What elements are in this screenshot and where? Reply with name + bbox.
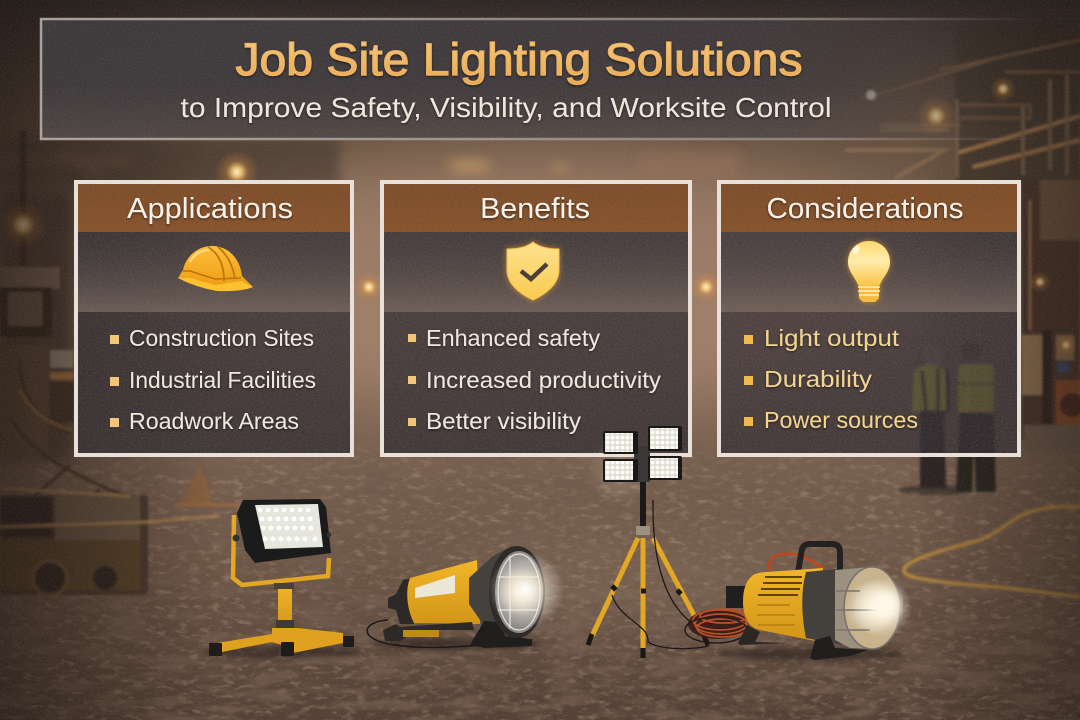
list: benefits	[408, 325, 662, 434]
list: applications: Roadwork Areas	[129, 408, 299, 434]
pole	[640, 480, 646, 530]
head	[237, 499, 331, 563]
list: benefits: Better visibility	[426, 408, 582, 434]
background: machine at lower left	[0, 462, 240, 595]
subtitle: to Improve Safety, Visibility, and Worksite Control	[180, 92, 832, 123]
equipment: yellow spot light with cable reel	[685, 544, 912, 660]
list: considerations: Light output	[764, 325, 900, 351]
list: considerations	[744, 325, 918, 433]
shroud	[802, 569, 842, 645]
icon: shield with check	[507, 242, 559, 300]
heading: benefits: Benefits	[480, 193, 590, 225]
background: ground texture	[0, 430, 1080, 720]
background: scaffolding at upper right	[845, 18, 1080, 183]
list: applications: Industrial Facilities	[129, 367, 316, 393]
panel: considerations	[719, 182, 1019, 455]
title panel	[41, 19, 1041, 139]
equipment: LED flood light on stand	[204, 499, 360, 658]
power box	[726, 586, 748, 608]
skid	[383, 622, 474, 641]
equipment: yellow work light with cord	[367, 546, 564, 650]
cage	[498, 554, 540, 630]
LED grid	[258, 508, 317, 541]
heading: applications: Applications	[127, 193, 293, 225]
body	[407, 560, 480, 624]
list: considerations: Power sources	[764, 407, 918, 433]
list: benefits: Increased productivity	[426, 367, 662, 393]
orange hose	[769, 554, 824, 570]
rear cap	[388, 578, 414, 624]
background: two workers	[899, 341, 996, 495]
cable coil	[688, 609, 748, 639]
shroud	[469, 546, 520, 638]
tripod legs	[592, 538, 705, 650]
background: light tower at left	[0, 130, 130, 520]
background: site lights	[0, 76, 1077, 356]
list: considerations: Durability	[764, 366, 873, 392]
background: upper site structures	[0, 138, 740, 460]
post	[278, 584, 292, 628]
background: orange hose	[904, 507, 1080, 597]
base	[217, 628, 343, 653]
list: applications	[110, 325, 316, 434]
title: Job Site Lighting Solutions	[236, 34, 802, 85]
feet	[738, 625, 788, 645]
handle	[798, 544, 840, 572]
list: applications: Construction Sites	[129, 325, 314, 351]
equipment: tripod with four flood lights	[586, 426, 709, 658]
cage back	[835, 567, 872, 649]
body	[743, 568, 823, 641]
background: machines at right edge	[1000, 180, 1080, 453]
icon: hard hat	[178, 246, 253, 291]
cage	[836, 567, 900, 649]
panel: benefits	[382, 182, 690, 455]
icon: light bulb	[848, 241, 890, 302]
panel: applications	[76, 182, 352, 455]
floodlights	[603, 426, 682, 482]
heading: considerations: Considerations	[766, 193, 964, 225]
cables	[612, 500, 709, 649]
U bracket	[233, 515, 329, 585]
list: benefits: Enhanced safety	[426, 325, 601, 351]
